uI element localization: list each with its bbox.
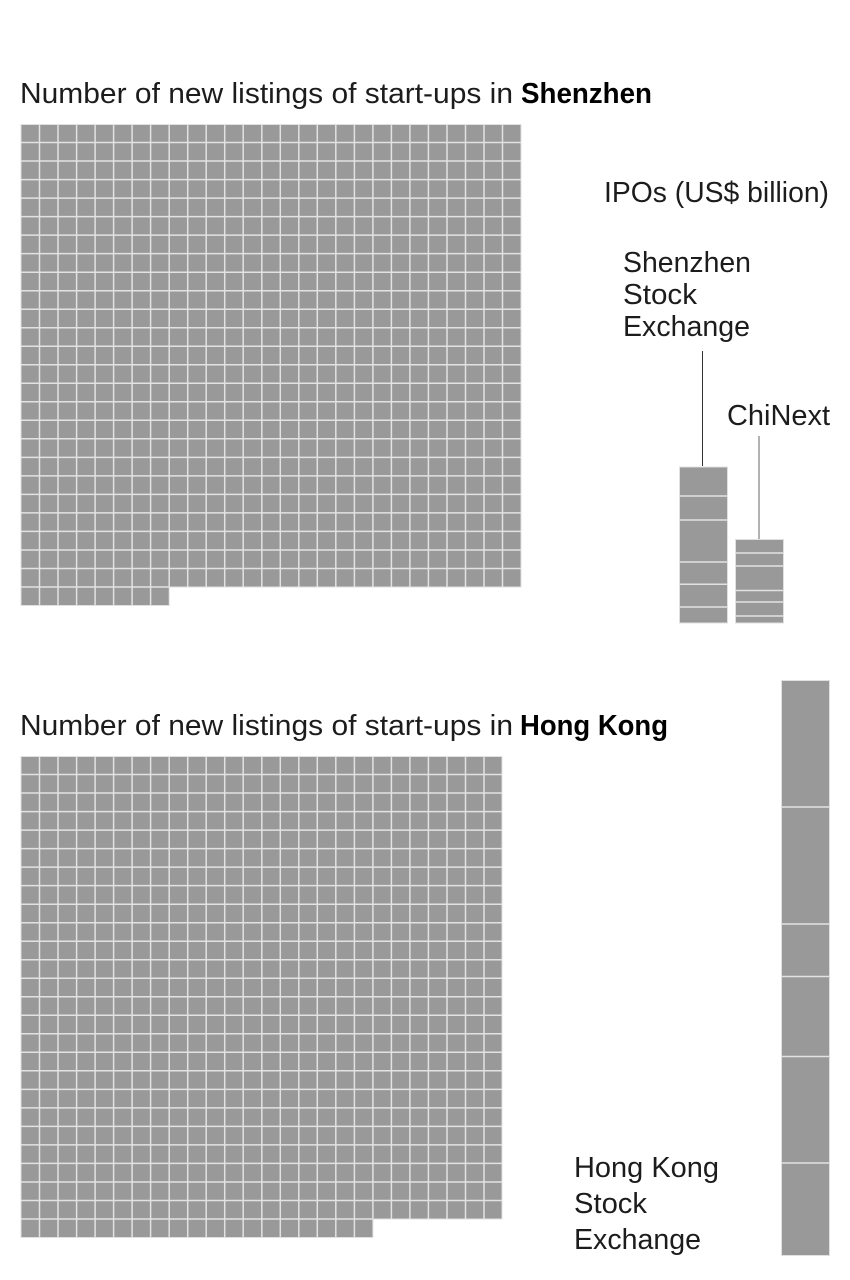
label: Shenzhen Stock Exchange: Shenzhen bbox=[623, 247, 751, 279]
stacked bar: Shenzhen Stock Exchange IPOs bbox=[680, 467, 728, 623]
label: Shenzhen Stock Exchange: Stock bbox=[623, 279, 698, 311]
heading: Shenzhen listings: Shenzhen bbox=[521, 78, 652, 110]
heading: IPOs in US$ billion: IPOs (US$ billion) bbox=[604, 177, 829, 209]
waffle chart: Hong Kong listings bbox=[21, 756, 502, 1238]
leader line: ChiNext bbox=[758, 436, 760, 539]
heading: Hong Kong listings: Hong Kong bbox=[520, 710, 668, 742]
leader line: Shenzhen Stock Exchange bbox=[702, 351, 704, 466]
label: Hong Kong Stock Exchange: Stock bbox=[574, 1188, 648, 1220]
label: Shenzhen Stock Exchange: Exchange bbox=[623, 311, 750, 343]
waffle chart: Shenzhen listings bbox=[21, 124, 521, 606]
label: Hong Kong Stock Exchange: Hong Kong bbox=[574, 1152, 719, 1184]
label: Hong Kong Stock Exchange: Exchange bbox=[574, 1224, 701, 1256]
heading: Hong Kong listings: Number of new listings of start-ups in bbox=[20, 710, 513, 742]
stacked bar: Hong Kong Stock Exchange IPOs bbox=[782, 680, 830, 1256]
stacked bar: ChiNext IPOs bbox=[736, 540, 784, 623]
label: ChiNext: ChiNext bbox=[727, 400, 830, 432]
label: Shenzhen Stock Exchange bbox=[623, 247, 751, 343]
label: Hong Kong Stock Exchange bbox=[574, 1152, 719, 1256]
heading: Shenzhen listings: Number of new listings of start-ups in bbox=[20, 78, 513, 110]
